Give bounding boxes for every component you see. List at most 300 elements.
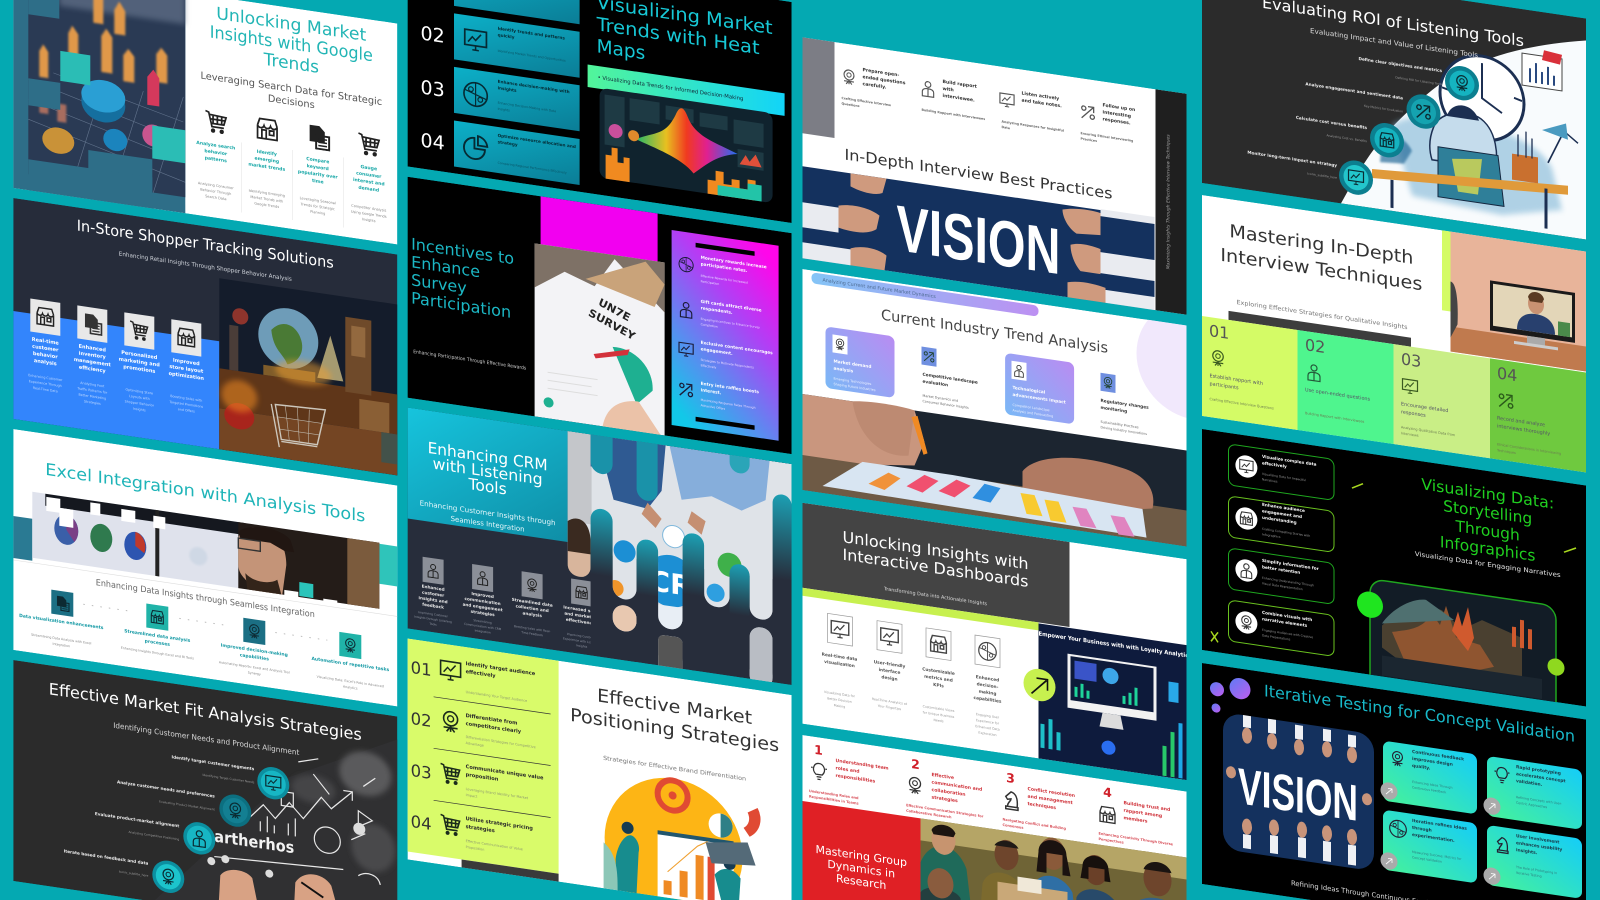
four coloured columns: Establish rapport with (1209, 373, 1263, 387)
four columns of points: emerging (254, 155, 279, 165)
four points: Enhanced (422, 584, 445, 592)
four numbered points: Enhancing Creativity Through Diverse (1098, 832, 1174, 847)
accent dashes (1211, 461, 1576, 695)
list with circular icons: Defining ROI for Listening Tools (1395, 75, 1442, 86)
numbered list: Impact (466, 793, 478, 799)
four columns of points: Using Google Trends (351, 210, 387, 219)
numbered rows: Insights (498, 107, 510, 113)
four points: Enhanced (79, 344, 106, 354)
four points: Analyzing Foot (80, 381, 105, 388)
four outlined boxes: understanding (1262, 515, 1297, 525)
image: 3D data terrain (1370, 579, 1556, 726)
title: Excel Integration with Analysis Tools (45, 460, 365, 526)
illustration: team with chart on yellow circle (604, 768, 761, 900)
four tips: Ensuring Ethical Interviewing (1080, 131, 1134, 143)
four columns of points: Insights (362, 217, 376, 223)
four outlined boxes: Engaging Audiences with Creative (1262, 628, 1313, 639)
list with circular icons: Key Metrics for Evaluation (1364, 104, 1403, 114)
numbered list: Utilize strategic pricing (466, 816, 533, 832)
four points: Experience Through (29, 379, 62, 388)
four feedback cards: validation. (1516, 778, 1543, 788)
four outlined boxes: Narratives (1262, 477, 1278, 484)
four features: Customizable Views (923, 704, 955, 713)
four tips: with (942, 86, 954, 94)
photo: survey paper on clipboard: SURVEY (586, 306, 638, 343)
four numbered points: roles and (835, 765, 860, 775)
four coloured columns: 01 (1209, 321, 1229, 343)
four columns of points: patterns (205, 155, 227, 164)
subtitle: Transforming Data into Actionable Insights (883, 586, 987, 607)
four feedback cards: Refining Concepts with User- (1516, 795, 1562, 806)
teal pillars between photo strips (591, 424, 792, 685)
four columns of points: Identifying Emerging (249, 189, 285, 198)
trend cards: Regulatory changes (1100, 398, 1149, 411)
subtitle: Strategies for Effective Brand Differentiation (603, 756, 746, 783)
four coloured columns: Crafting Effective Interview Questions (1209, 397, 1274, 411)
four columns of points: Analyze search (196, 140, 235, 152)
four points: feedback (422, 602, 444, 610)
subtitle: Enhancing Retail Insights Through Shopper Behavior Analysis (119, 252, 292, 283)
four points: Strategies (84, 399, 101, 406)
four coloured columns: Interviews (1401, 431, 1419, 438)
four numbered points: collaboration (932, 787, 966, 798)
panel: Visualizing Data: Storytelling Through Infographics (1202, 429, 1586, 730)
list with circular icons: Evaluating Product-Market Alignment (159, 799, 216, 812)
four features: Better Decision (827, 696, 852, 704)
trend cards: Analysis and Forecasting (1012, 408, 1053, 418)
four points: Insights through Listening (414, 614, 452, 624)
four points: Improved (471, 591, 494, 599)
list with circular icons: Iconic_subtitle_here (1307, 172, 1337, 180)
four points: Better Marketing (78, 393, 106, 401)
four points: Targeted Promotions (168, 400, 203, 409)
four columns of points: Trends for Strategic (300, 202, 335, 211)
numbered rows: 02 (421, 21, 445, 48)
image: loyalty analytics dashboard (1024, 621, 1192, 781)
four points: Experience with Listening (563, 636, 600, 646)
list with circular icons: Monitor long-term impact on strategy (1247, 150, 1337, 168)
photo: hands over colour bar chart (802, 392, 1186, 546)
four numbered points: Perspectives (1098, 837, 1124, 845)
four features: interface (879, 667, 900, 676)
list with circular icons: Analyzing Cost vs. Benefits (1326, 133, 1367, 143)
four coloured columns: Encourage detailed (1401, 401, 1448, 414)
four columns of points: Search Data (205, 194, 226, 201)
four points: Insights (133, 407, 146, 412)
four outlined boxes: engagement and (1262, 508, 1302, 519)
side bands (13, 516, 32, 561)
four points (28, 298, 204, 421)
four features: Enhanced Data (975, 724, 1000, 732)
list with circular icons: Identifying Target Customer Needs (202, 773, 255, 784)
four points: insights and (419, 595, 448, 604)
four points: Shopper Behavior (125, 399, 155, 408)
numbered list: effectively (466, 669, 496, 680)
four features: visualization (824, 659, 855, 669)
four features: Real-time data (822, 652, 857, 663)
four points: Improved (173, 357, 200, 367)
four points: optimization (169, 371, 204, 382)
chart: dashboard heat map (600, 88, 773, 203)
gradient panel with four incentives: Engaging Incentives to Enhance Survey (701, 317, 760, 330)
gradient panel with four incentives: Gift cards attract diverse (701, 299, 762, 314)
four numbered points: Responsibilities in Teams (809, 794, 859, 806)
lime strip (1442, 230, 1450, 312)
gradient panel with four incentives: Monetary rewards increase (701, 255, 767, 270)
four coloured columns: Building Rapport with Interviewees (1305, 411, 1365, 424)
four tips: responses. (1102, 116, 1131, 127)
four points: inventory (79, 351, 107, 361)
photo strips: team around CRM table: CR (650, 564, 692, 603)
four points: Layouts with (129, 394, 150, 401)
subtitle: Enhancing Customer Insights through (420, 498, 556, 527)
timeline of four steps: Enhancing Insights through Excel and BI Tools (121, 646, 194, 661)
panel: Excel Integration with Analysis Tools (13, 429, 397, 706)
four features: design (881, 674, 898, 683)
four coloured columns: interviews thoroughly (1497, 423, 1550, 437)
four features: Customizable (922, 666, 955, 677)
four features: Visualizing Data for (824, 690, 856, 699)
four points: Boosting Sales with (170, 394, 202, 403)
title: Visualizing Data: (1421, 475, 1554, 513)
four tips: ended questions (862, 74, 906, 86)
four tips: Practices (1080, 137, 1097, 143)
four columns of points: Planning (310, 210, 325, 216)
title: Incentives to (411, 234, 514, 268)
four tips: and take notes. (1022, 98, 1062, 109)
numbered list: Understanding Your Target Audience (466, 690, 527, 703)
four points: management (74, 357, 111, 368)
gradient panel with four incentives: Exclusive content encourages (701, 340, 773, 356)
four numbered points: Effective (932, 772, 954, 781)
numbered list: 03 (411, 761, 432, 783)
four outlined boxes: narrative elements (1262, 616, 1308, 628)
timeline of four steps: Analytics (343, 684, 358, 691)
photo: survey paper on clipboard (535, 243, 665, 435)
trend cards: Market demand (833, 359, 871, 370)
numbered rows: strategy (498, 139, 518, 147)
four outlined boxes: better retention (1262, 564, 1300, 575)
title: Unlocking Insights with (843, 528, 1028, 573)
four points: behavior (33, 351, 58, 361)
list with circular icons: Define clear objectives and metrics (1358, 56, 1442, 73)
panel: Unlocking Insights with Interactive Dashboards (802, 503, 1192, 781)
numbered list: proposition (466, 772, 499, 783)
gradient panel with four incentives: Strategies to Motivate Respondents (701, 358, 754, 370)
gradient panel with four incentives: participation rates. (701, 261, 748, 274)
four columns of points: keyword (307, 163, 329, 172)
four tips: interesting (1102, 109, 1131, 120)
four tips (842, 64, 1135, 149)
four features: Enhanced (976, 674, 999, 684)
timeline of four steps: Data visualization enhancements (19, 613, 104, 631)
node: lime circle (1548, 657, 1564, 677)
four coloured columns: Use open-ended questions (1305, 387, 1371, 403)
four outlined boxes: Visualize complex data (1262, 454, 1317, 467)
title: Insights with Google (210, 22, 373, 66)
four coloured columns: responses (1401, 409, 1426, 419)
list with circular icons: Evaluate product-market alignment (95, 811, 179, 828)
four points: analysis (523, 610, 542, 618)
four outlined boxes: Visualizing Data for Impactful (1262, 472, 1306, 482)
panel: Enhancing CRM with Listening Tools (408, 398, 792, 694)
four numbered points: Collaborative Research (906, 809, 952, 819)
timeline of four steps: Improved decision-making (221, 643, 288, 658)
four features (822, 613, 1002, 738)
list with circular icons: Iterate based on feedback and data (64, 848, 148, 866)
lime strip (802, 588, 1038, 630)
four points: Real-time (32, 337, 59, 347)
timeline of four steps: Streamlined data analysis (124, 628, 191, 644)
title: Unlocking Market (216, 4, 367, 46)
title: Effective Market Fit Analysis Strategies (49, 679, 362, 744)
numbered list: 01 (411, 658, 432, 680)
four feedback cards: insights. (1516, 847, 1538, 856)
four columns of points: Gauge (361, 164, 377, 172)
four tips: Follow up on (1102, 102, 1135, 113)
gradient panel with four incentives: Effective Rewards for Increased (701, 274, 748, 285)
four numbered points: 2 (911, 756, 920, 772)
timeline of four steps: Automating Reports: Excel and Analysis Tool (219, 660, 290, 675)
photo: globe, shelf and cart (219, 278, 397, 475)
trend cards: Shaping Future Industries (833, 382, 876, 392)
four feedback cards: enhances usability (1516, 840, 1562, 853)
title: Storytelling (1443, 497, 1532, 528)
image: loyalty analytics dashboard: Empower Your Business with with Loyalty Analytics (1038, 631, 1192, 660)
four features: Making (834, 703, 845, 709)
dark bar (1228, 311, 1411, 347)
subtitle: Enhancing Data Insights through Seamless Integration (96, 578, 315, 620)
trend cards: Competitor Landscape (1012, 403, 1050, 412)
four columns of points: interest and (353, 177, 385, 188)
numbered list: 02 (411, 709, 432, 731)
title: Effective Market (597, 685, 752, 729)
panel: Evaluating ROI of Listening Tools (1202, 0, 1586, 239)
trend cards: Sustainability Practices (1100, 420, 1139, 429)
photo: chalkboard with hands (207, 740, 398, 900)
numbered rows: Enhancing Decision-Making with Data (498, 101, 556, 113)
numbered rows: Comparing Regional Performance Effectively (498, 161, 567, 175)
four points: Traffic Patterns for (76, 386, 108, 395)
title: In-Depth Interview Best Practices (844, 146, 1113, 203)
title: Positioning Strategies (570, 705, 779, 757)
panel: Current Industry Trend Analysis (802, 246, 1252, 556)
photo: VISION with ring of hands (1223, 712, 1374, 871)
four numbered points: and management (1028, 794, 1073, 806)
subtitle: Leveraging Search Data for Strategic (200, 71, 382, 108)
four points: collection and (516, 603, 549, 613)
four points: Increased sales (563, 604, 600, 615)
title: Mastering Group (815, 843, 907, 869)
numbered list: Identify target audience (466, 661, 536, 677)
four feedback cards: Measuring Success: Metrics for (1412, 850, 1462, 861)
subtitle: Visualizing Data for Engaging Narratives (1415, 550, 1561, 579)
four points: Improving Customer (567, 632, 597, 640)
four feedback cards: Concept Validation (1412, 855, 1442, 864)
four features: User-friendly (874, 659, 905, 670)
subtitle: Seamless Integration (451, 514, 525, 534)
four points: efficiency (79, 365, 106, 375)
four numbered points: Understanding Roles and (809, 789, 859, 800)
gradient panel with four incentives: respondents. (701, 305, 733, 316)
title: Infographics (1440, 533, 1535, 565)
list with circular icons: Analyze customer needs and preferences (117, 779, 215, 799)
four feedback cards: accelerates concept (1516, 771, 1565, 784)
four feedback cards (1380, 740, 1582, 899)
subtitle band (588, 64, 785, 116)
title: Interactive Dashboards (843, 546, 1028, 591)
title: Iterative Testing for Concept Validation (1264, 681, 1575, 746)
trend cards: monitoring (1100, 405, 1127, 415)
four tips: carefully. (862, 81, 887, 91)
photo: 3D market pieces (28, 0, 185, 213)
four tips: interviewee. (942, 93, 975, 104)
title: Research (836, 872, 886, 892)
four outlined boxes: Visual Data Representation (1262, 581, 1303, 591)
title: Survey (411, 270, 467, 297)
four columns of points: popularity over (298, 169, 338, 181)
subtitle: Identifying Customer Needs and Product Alignment (113, 721, 299, 757)
panel: Effective Market Fit Analysis Strategies (13, 660, 397, 900)
four numbered points: Conflict resolution (1028, 786, 1075, 799)
illustration: analyst at desk (1372, 25, 1578, 235)
four feedback cards: quality. (1412, 763, 1431, 772)
four columns of points: Competitor Analysis (351, 204, 386, 213)
four columns of points: Compare (306, 156, 329, 165)
trend cards (826, 326, 1149, 436)
timeline of four steps: Synergy (248, 670, 261, 676)
four columns of points: time (312, 178, 324, 186)
panel: Visualizing Market Trends with Heat Maps (408, 0, 792, 223)
four numbered points: Building trust and (1124, 800, 1170, 813)
four coloured columns: Techniques (1496, 448, 1516, 455)
trend cards: Driving Industry Innovations (1100, 425, 1147, 436)
panel: Incentives to Enhance Survey Participation (408, 177, 792, 454)
four tips: Prepare open- (862, 67, 899, 79)
gradient panel with four incentives (672, 230, 779, 441)
panel: In-Depth Interview Best Practices (802, 37, 1186, 317)
title: In-Store Shopper Tracking Solutions (77, 216, 334, 272)
four outlined boxes: Crafting Compelling Stories with (1262, 527, 1310, 538)
list with circular icons: Analyze engagement and sentiment data (1305, 81, 1403, 101)
trend cards: Market Dynamics and (922, 394, 958, 403)
four features: capabilities (974, 695, 1002, 705)
photo: VISION with hands: VISION (896, 191, 1060, 288)
four features: for Unique Business (923, 710, 955, 719)
four points: Personalized (121, 350, 158, 361)
four tips: Listen actively (1022, 91, 1059, 102)
four numbered points: techniques (1028, 801, 1056, 811)
four coloured columns: Ethical Considerations in Interviewing (1497, 442, 1561, 456)
title: Through (1455, 517, 1520, 545)
four points: Enhancing Customer (28, 373, 63, 382)
four points: Communication with CRM (464, 622, 502, 631)
title: Dynamics in (827, 858, 895, 881)
gradient panel with four incentives: Attractive Offers (701, 403, 726, 411)
vertical caption: Maximizing Insights Through Effective Interview Techniques (1166, 133, 1171, 270)
four points: Time Feedback (520, 630, 543, 637)
panel: Unlocking Market Insights with Google Trends (13, 0, 397, 244)
panel: Mastering Group Dynamics in Research (802, 735, 1186, 900)
timeline of four steps: Streamlining Data Analysis with Excel (31, 633, 92, 645)
numbered rows: Optimize resource allocation and (498, 133, 576, 149)
four feedback cards: improves design (1412, 756, 1453, 768)
four features: Engaging User (976, 712, 1000, 720)
numbered rows: Identify trends and patterns (498, 26, 565, 41)
four outlined boxes: Enhance audience (1262, 502, 1305, 513)
numbered list: Communicate unique value (466, 764, 544, 782)
photo: analyst at screens (13, 492, 398, 617)
title: with Listening (433, 455, 543, 489)
photo: video interview (1450, 232, 1586, 371)
four points: customer (422, 590, 445, 598)
four columns of points: Leveraging Seasonal (300, 196, 336, 205)
numbered rows: insights (498, 85, 517, 93)
four feedback cards: Enhancing Ideas Through (1412, 780, 1452, 790)
four outlined boxes: Infographics (1262, 532, 1281, 539)
four columns of points: Behavior Through (200, 188, 231, 196)
subtitle: Evaluating Impact and Value of Listening Tools (1310, 27, 1478, 60)
title: Enhancing CRM (428, 439, 548, 475)
trend cards: evaluation (922, 379, 948, 388)
four points: and Offers (178, 407, 195, 414)
four numbered points: 3 (1006, 770, 1015, 786)
panel: Mastering In-Depth Interview Techniques (1202, 195, 1586, 472)
four feedback cards: User involvement (1516, 833, 1559, 846)
four numbered points: members (1124, 815, 1148, 825)
list with circular icons: Analyzing Competitive Positioning (128, 830, 179, 841)
numbered list: Differentiate from (466, 713, 517, 727)
subtitle pill (812, 272, 1038, 317)
four columns of points: Analyzing Consumer (198, 181, 234, 190)
four numbered points: 1 (814, 742, 823, 758)
photo: team at table (920, 818, 1186, 900)
four points: Boosting Sales with Real- (514, 624, 550, 633)
four features: Real-Time Analytics at (872, 697, 908, 706)
gradient panel with four incentives: Participation (701, 279, 719, 286)
four feedback cards: experimentation. (1412, 832, 1455, 844)
four coloured columns (1202, 316, 1586, 472)
list with circular icons: Identify target customer segments (172, 754, 255, 771)
four points: and engagement (463, 602, 503, 612)
four points: analysis (34, 358, 57, 367)
panel: In-Store Shopper Tracking Solutions (13, 198, 397, 475)
photo: VISION with hands (802, 165, 1154, 312)
list with circular icons: Calculate cost versus benefits (1296, 115, 1367, 130)
trend cards: Emerging Technologies (833, 377, 872, 386)
four points: and marketing (564, 611, 599, 621)
four columns of points (196, 108, 387, 234)
title: Participation (411, 288, 511, 322)
decorative circle (1136, 295, 1252, 428)
four numbered points: Consensus (1002, 823, 1023, 830)
four feedback cards: Iterative Testing (1516, 871, 1542, 878)
four columns of points: Market Trends with (250, 195, 283, 204)
four outlined boxes (1228, 444, 1334, 656)
photo: chalkboard with hands: artherhos (214, 827, 294, 857)
subtitle: Decisions (268, 93, 315, 111)
four points: strategies (471, 609, 495, 617)
numbered rows: 04 (421, 128, 445, 155)
four columns of points: behavior (204, 148, 228, 158)
numbered list: 04 (411, 812, 432, 834)
photo: VISION with ring of hands: VISION (1238, 758, 1358, 832)
panel: Iterative Testing for Concept Validation (1202, 663, 1586, 900)
four numbered points: 4 (1103, 784, 1112, 800)
timeline of four steps: Automation of repetitive tasks (311, 656, 389, 673)
four columns of points: demand (358, 185, 379, 194)
four features: Experience for (976, 718, 1000, 726)
